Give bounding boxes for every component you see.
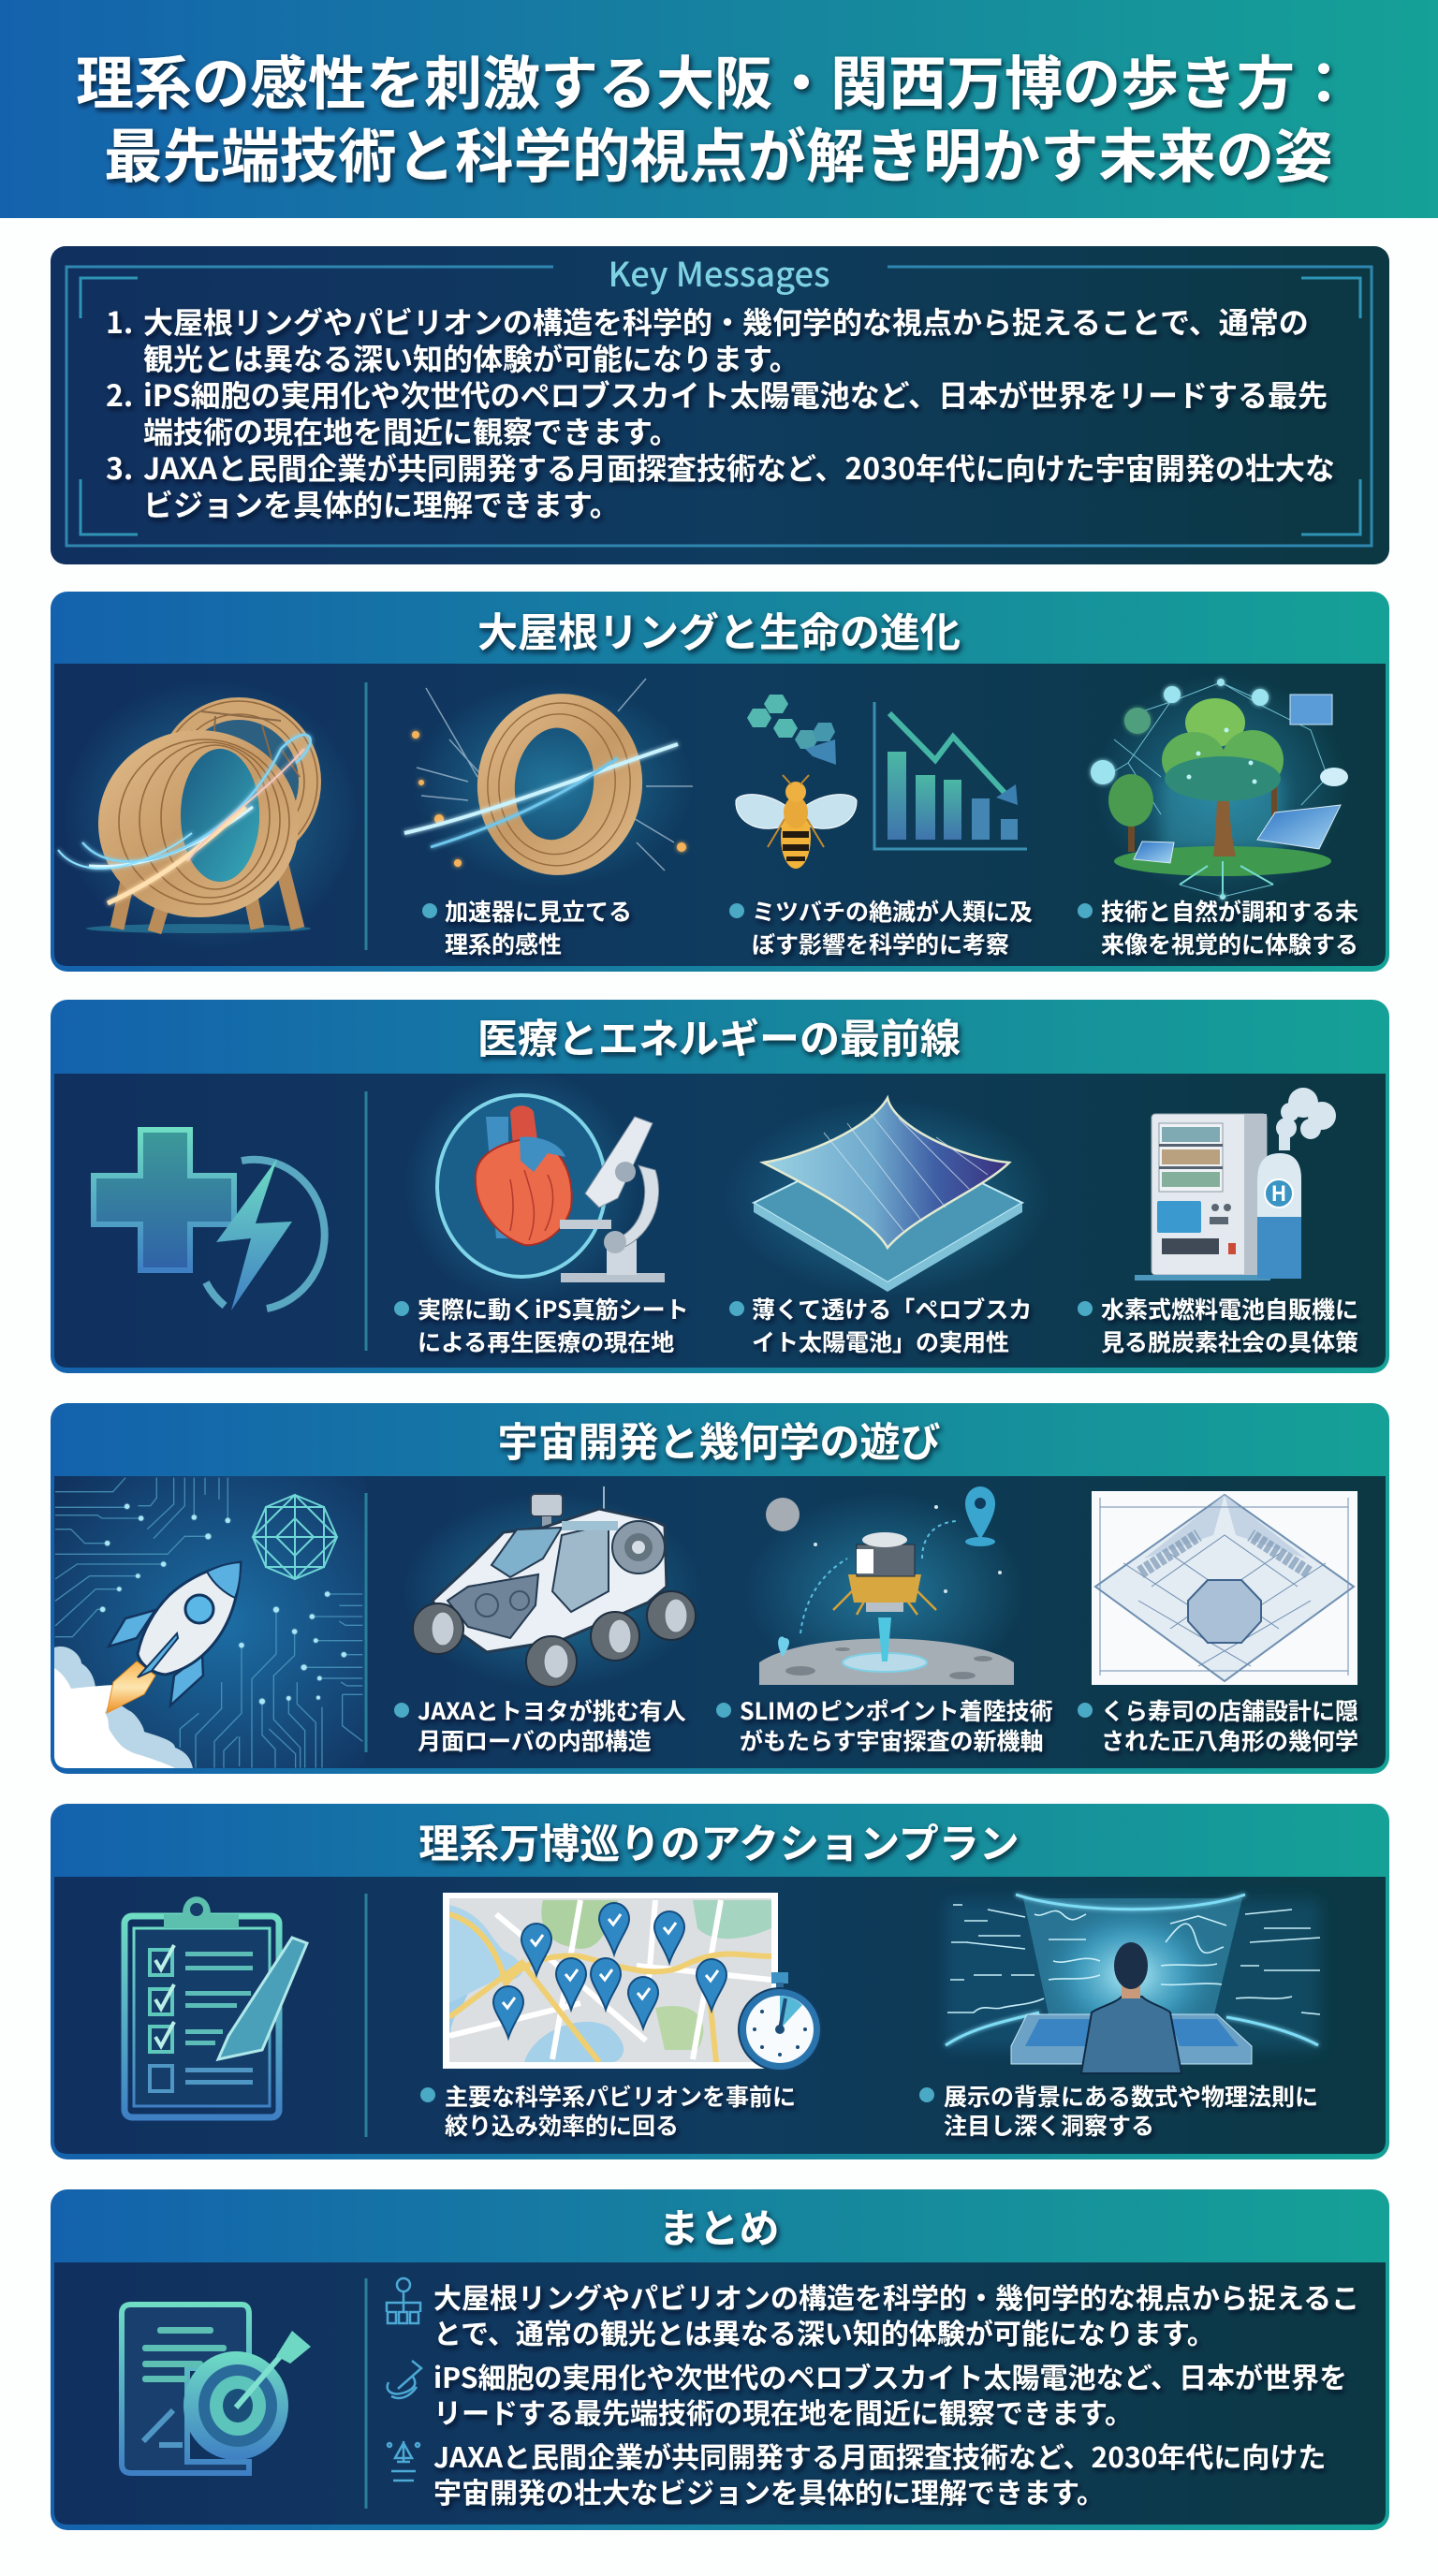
caption group: がもたらす宇宙探査の新機軸 xyxy=(740,1723,1044,1757)
summary text: JAXAと民間企業が共同開発する月面探査技術など、2030年代に向けた xyxy=(433,2435,1326,2476)
caption group: 展示の背景にある数式や物理法則に xyxy=(944,2079,1318,2113)
icon: heart and microscope xyxy=(404,1069,665,1303)
key message list: ビジョンを具体的に理解できます。 xyxy=(143,482,620,525)
summary text: iPS細胞の実用化や次世代のペロブスカイト太陽電池など、日本が世界を xyxy=(433,2355,1347,2396)
key message list: 観光とは異なる深い知的体験が可能になります。 xyxy=(143,336,800,379)
icon: medical cross and lightning xyxy=(94,1130,325,1310)
key message list: 端技術の現在地を間近に観察できます。 xyxy=(143,409,680,452)
caption group: 加速器に見立てる xyxy=(445,894,632,928)
panel: key messages xyxy=(51,246,1389,564)
icon: scientist viewing formulas xyxy=(946,1895,1320,2073)
icon: hydrogen vending machine xyxy=(1135,1088,1336,1281)
key message list: JAXAと民間企業が共同開発する月面探査技術など、2030年代に向けた宇宙開発の壮大な xyxy=(143,446,1335,489)
caption group: 技術と自然が調和する未 xyxy=(1101,894,1358,928)
caption group: 主要な科学系パビリオンを事前に xyxy=(445,2079,796,2113)
panel: 大屋根リングと生命の進化 xyxy=(51,592,1389,972)
caption group: 理系的感性 xyxy=(445,927,562,960)
caption group: JAXAとトヨタが挑む有人 xyxy=(418,1693,686,1727)
summary text xyxy=(433,2276,1359,2511)
caption group xyxy=(394,1292,1358,1358)
icon: stopwatch xyxy=(739,1972,821,2071)
key message list: 3. xyxy=(106,446,133,489)
key message list: 1. xyxy=(106,300,133,343)
title xyxy=(76,37,1353,194)
key message list xyxy=(106,300,1335,525)
title: 理系の感性を刺激する大阪・関西万博の歩き方： xyxy=(76,37,1353,121)
caption group: 月面ローバの内部構造 xyxy=(418,1723,652,1757)
panel: 医療とエネルギーの最前線 xyxy=(51,1000,1389,1373)
caption group xyxy=(422,894,1358,960)
caption group: くら寿司の店舗設計に隠 xyxy=(1101,1693,1358,1727)
heading: 大屋根リングと生命の進化 xyxy=(477,601,961,659)
caption group: 来像を視覚的に体験する xyxy=(1101,927,1358,960)
title: 最先端技術と科学的視点が解き明かす未来の姿 xyxy=(104,109,1333,194)
caption group: ミツバチの絶滅が人類に及 xyxy=(752,894,1033,928)
bar chart: decline xyxy=(874,702,1027,849)
icon: checklist clipboard xyxy=(125,1896,307,2117)
icon: tree with network and solar panels xyxy=(1091,674,1348,900)
caption group xyxy=(420,2079,1318,2142)
icon: lunar lander and SLIM landing xyxy=(744,1486,1025,1690)
icon: cell and solar xyxy=(388,2361,421,2398)
caption group xyxy=(394,1693,1358,1757)
caption group: ぼす影響を科学的に考察 xyxy=(752,927,1009,960)
key message list: iPS細胞の実用化や次世代のペロブスカイト太陽電池など、日本が世界をリードする最先 xyxy=(143,373,1328,416)
heading: 医療とエネルギーの最前線 xyxy=(477,1007,961,1065)
heading: まとめ xyxy=(659,2197,779,2255)
icon: hydrogen vending machine: H xyxy=(1271,1178,1286,1208)
caption group: された正八角形の幾何学 xyxy=(1101,1723,1358,1757)
icon: wooden ring with light xyxy=(58,679,360,950)
summary text: 宇宙開発の壮大なビジョンを具体的に理解できます。 xyxy=(433,2470,1105,2511)
icon: rocket launch xyxy=(388,2441,419,2481)
caption group: による再生医療の現在地 xyxy=(418,1325,674,1358)
heading: Key Messages: Key Messages xyxy=(609,248,829,297)
key message list: 2. xyxy=(106,373,133,416)
key message list: 大屋根リングやパビリオンの構造を科学的・幾何学的な視点から捉えることで、通常の xyxy=(143,300,1309,343)
icon: pavilion structure xyxy=(387,2278,420,2323)
heading: 理系万博巡りのアクションプラン xyxy=(418,1812,1020,1870)
caption group: 薄くて透ける「ペロブスカ xyxy=(752,1292,1032,1325)
icon: particle accelerator ring xyxy=(404,679,693,887)
heading: 宇宙開発と幾何学の遊び xyxy=(498,1411,940,1469)
icon: rocket over circuit board xyxy=(54,1476,365,1768)
panel: 宇宙開発と幾何学の遊び xyxy=(51,1403,1389,1774)
icon: kura sushi blueprint xyxy=(1092,1491,1357,1685)
caption group: 注目し深く洞察する xyxy=(944,2108,1154,2142)
icon: bee xyxy=(736,695,857,869)
icon: route map with pins xyxy=(443,1893,778,2069)
summary text: とで、通常の観光とは異なる深い知的体験が可能になります。 xyxy=(433,2311,1215,2352)
caption group: SLIMのピンポイント着陸技術 xyxy=(740,1693,1053,1727)
caption group: 水素式燃料電池自販機に xyxy=(1101,1292,1358,1325)
panel: 理系万博巡りのアクションプラン xyxy=(51,1804,1389,2159)
title banner xyxy=(0,0,1438,218)
icon: document and target xyxy=(122,2305,311,2473)
summary text: リードする最先端技術の現在地を間近に観察できます。 xyxy=(433,2391,1133,2432)
summary text: 大屋根リングやパビリオンの構造を科学的・幾何学的な視点から捉えるこ xyxy=(433,2276,1359,2317)
caption group: 見る脱炭素社会の具体策 xyxy=(1101,1325,1358,1358)
panel: まとめ xyxy=(51,2189,1389,2530)
icon: lunar rover xyxy=(403,1486,702,1690)
caption group: 実際に動くiPS真筋シート xyxy=(418,1292,689,1325)
icon: perovskite solar sheet xyxy=(724,1098,1051,1296)
caption group: 絞り込み効率的に回る xyxy=(445,2108,679,2142)
caption group: イト太陽電池」の実用性 xyxy=(752,1325,1009,1358)
